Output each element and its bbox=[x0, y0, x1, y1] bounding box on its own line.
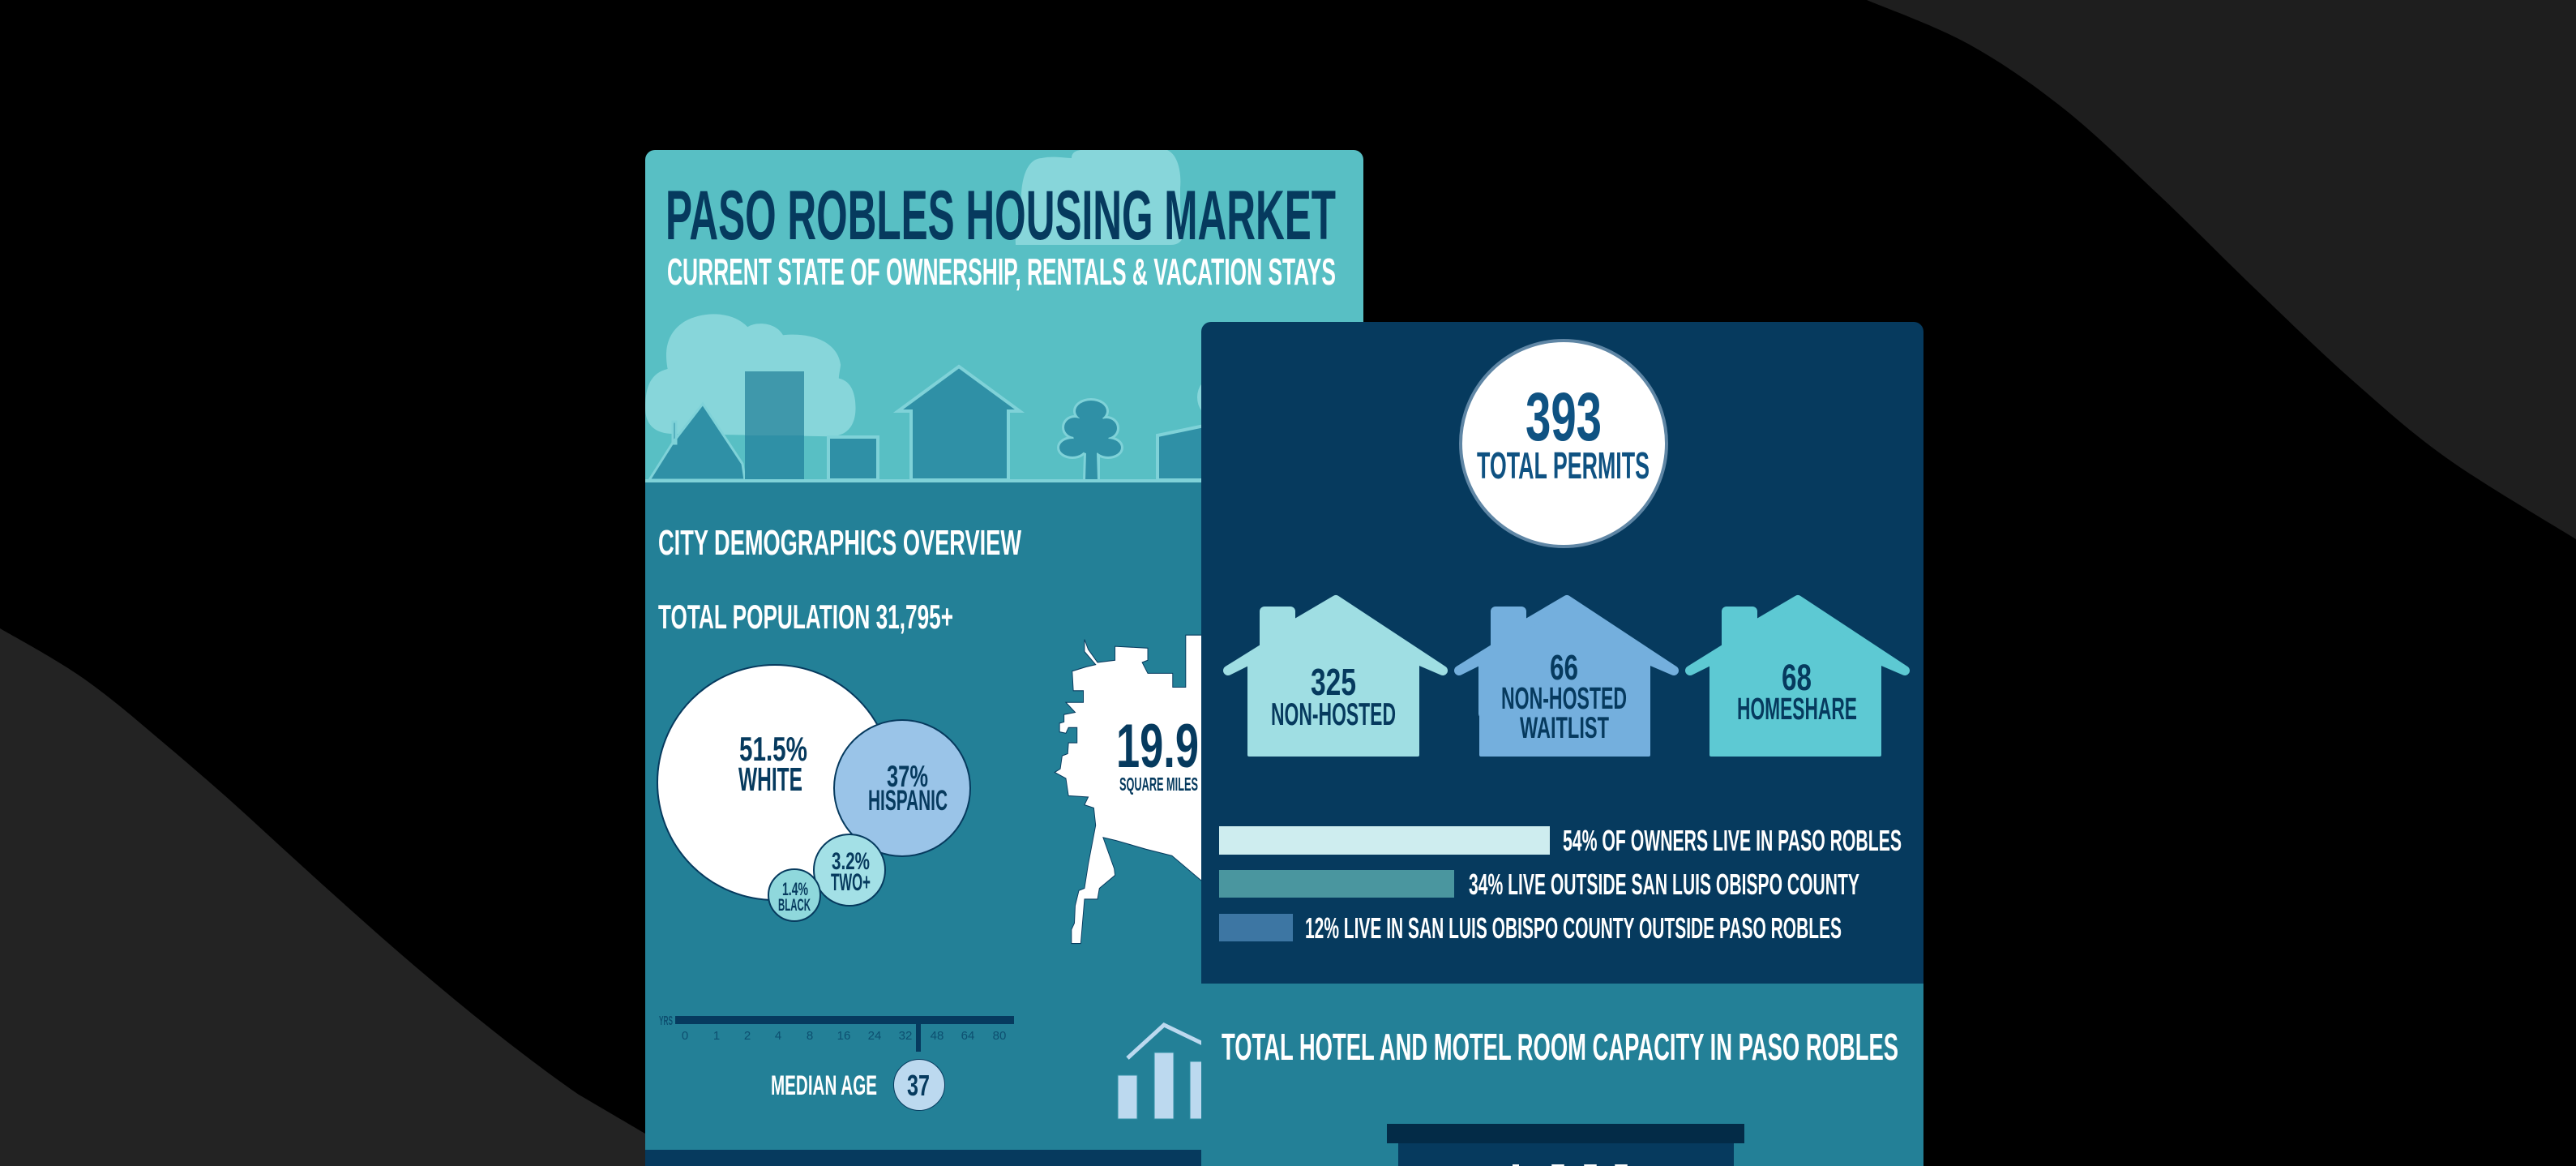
scale ticks: 4 bbox=[775, 1029, 781, 1043]
ground line bbox=[645, 479, 1363, 482]
callout: total permits circle: 393 bbox=[1525, 379, 1602, 455]
bubble: hispanic: 37% bbox=[887, 760, 928, 793]
scale ticks: 1 bbox=[713, 1029, 720, 1043]
icon: large cloud bbox=[645, 314, 856, 436]
panel: left housing market infographic bbox=[645, 150, 1363, 1166]
icon: bar chart with trend line bbox=[1118, 1025, 1209, 1119]
bar: 54 percent bbox=[1219, 824, 1902, 857]
heading: city demographics: CITY DEMOGRAPHICS OVERVIEW bbox=[658, 523, 1021, 563]
bar: 12 percent bbox=[1219, 911, 1842, 945]
icon: triangular roof building bbox=[649, 404, 745, 480]
icon: house homeshare: 68 bbox=[1782, 657, 1812, 698]
icon: tree bbox=[1059, 401, 1121, 480]
icon: tall building bbox=[745, 371, 804, 480]
median age value: 37 bbox=[907, 1069, 930, 1102]
bubble: two or more bbox=[814, 834, 885, 906]
icon: house non-hosted waitlist bbox=[1459, 600, 1674, 757]
icon: sloped roof building bbox=[1157, 423, 1216, 480]
bubble: white: 51.5% bbox=[739, 730, 807, 768]
scale ticks: 64 bbox=[961, 1029, 974, 1043]
hotel body bbox=[1398, 1143, 1734, 1166]
scale ticks: 8 bbox=[807, 1029, 813, 1043]
map shape bbox=[1055, 635, 1213, 944]
callout: total permits circle bbox=[1461, 341, 1667, 547]
bubble: black: 1.4% bbox=[782, 879, 808, 899]
wave shape: top right bbox=[1867, 0, 2576, 539]
icon: house non-hosted waitlist: 66 bbox=[1550, 648, 1578, 688]
scale ticks: 80 bbox=[993, 1029, 1006, 1043]
icon: cloud behind title bbox=[1016, 150, 1183, 245]
bubble: white: WHITE bbox=[738, 761, 802, 798]
scale ticks: 24 bbox=[868, 1029, 881, 1043]
median age label: MEDIAN AGE bbox=[771, 1070, 877, 1101]
icon: house bbox=[898, 367, 1020, 480]
icon: house homeshare: HOMESHARE bbox=[1737, 692, 1857, 727]
scale bar bbox=[675, 1016, 1014, 1024]
bar: 34 percent: 34% LIVE OUTSIDE SAN LUIS OBISPO COUNTY bbox=[1469, 868, 1859, 901]
panel: right permits infographic bbox=[1201, 322, 1923, 1166]
heading: hotel and motel capacity: TOTAL HOTEL AND MOTEL ROOM CAPACITY IN PASO ROBLES bbox=[1222, 1026, 1898, 1068]
map: city outline with area bbox=[1055, 635, 1213, 944]
wave shape: bottom left bbox=[0, 628, 645, 1166]
chart: median age scale bbox=[659, 1014, 1014, 1111]
hotel sign: cropped tops of the figures at the frame edge bbox=[1513, 1164, 1628, 1166]
scale marker bbox=[916, 1024, 921, 1052]
bar: 12 percent: 12% LIVE IN SAN LUIS OBISPO COUNTY OUTSIDE PASO ROBLES bbox=[1305, 911, 1842, 945]
icon: house non-hosted: NON-HOSTED bbox=[1271, 697, 1396, 732]
panel section: hotel capacity background bbox=[1201, 984, 1923, 1166]
title: PASO ROBLES HOUSING MARKET bbox=[665, 177, 1336, 255]
icon: house non-hosted: 325 bbox=[1311, 661, 1356, 703]
callout: total permits circle: TOTAL PERMITS bbox=[1477, 444, 1650, 487]
bubble: two or more: TWO+ bbox=[831, 869, 871, 896]
panel background: permits navy bbox=[1201, 322, 1923, 1166]
heading: total population: TOTAL POPULATION 31,795+ bbox=[658, 598, 953, 636]
icon: house non-hosted waitlist: NON-HOSTED bbox=[1501, 682, 1627, 716]
panel background: header teal bbox=[645, 150, 1363, 1166]
icon: house non-hosted bbox=[1228, 600, 1443, 757]
illustration: skyline bbox=[645, 314, 1363, 482]
icon: hotel building bbox=[1387, 1124, 1744, 1166]
bubble: black bbox=[768, 869, 820, 921]
bubble: hispanic bbox=[834, 720, 970, 856]
median age value bbox=[893, 1059, 945, 1111]
icon: house homeshare bbox=[1690, 600, 1905, 757]
subtitle: CURRENT STATE OF OWNERSHIP, RENTALS & VACATION STAYS bbox=[667, 251, 1336, 293]
scale ticks: 48 bbox=[931, 1029, 944, 1043]
bubble: black: BLACK bbox=[778, 896, 811, 915]
area value: 19.9 bbox=[1116, 712, 1199, 781]
scale ticks: 2 bbox=[744, 1029, 751, 1043]
panel section: demographics background bbox=[645, 482, 1363, 1166]
bubble: hispanic: HISPANIC bbox=[868, 785, 948, 817]
bubble: two or more: 3.2% bbox=[832, 848, 870, 875]
scale ticks: 0 bbox=[682, 1029, 688, 1043]
scale ticks bbox=[682, 1029, 1006, 1043]
hotel roof bbox=[1387, 1124, 1744, 1143]
bar: 34 percent bbox=[1219, 868, 1859, 901]
bar: 54 percent: 54% OF OWNERS LIVE IN PASO ROBLES bbox=[1563, 824, 1902, 857]
icon: cloud edge at right bbox=[1197, 378, 1228, 417]
chart: population bubbles bbox=[657, 665, 970, 921]
icon: small box building bbox=[828, 437, 878, 480]
scale unit: YRS bbox=[659, 1014, 673, 1028]
footer band: left panel bbox=[645, 1150, 1363, 1166]
scale ticks: 16 bbox=[837, 1029, 850, 1043]
icon: house non-hosted waitlist: WAITLIST bbox=[1520, 711, 1609, 744]
bar chart: owner residence bbox=[1219, 824, 1902, 945]
area unit: SQUARE MILES bbox=[1119, 774, 1198, 795]
scale ticks: 32 bbox=[899, 1029, 912, 1043]
bubble: white bbox=[657, 665, 892, 900]
